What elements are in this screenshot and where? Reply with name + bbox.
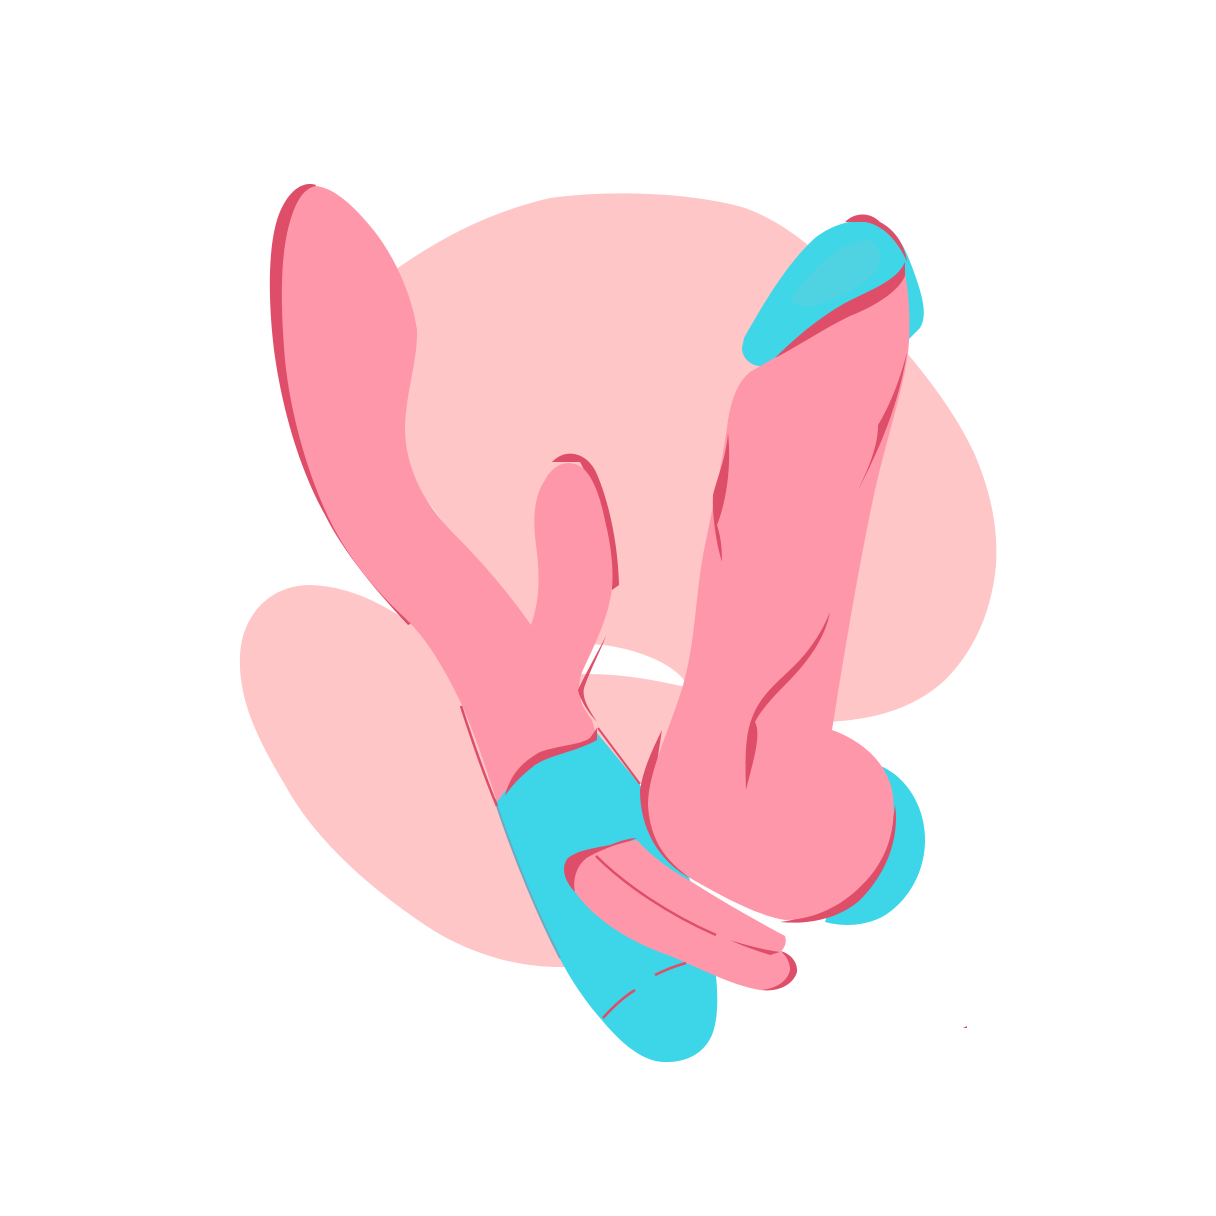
handle left edge line	[497, 806, 560, 958]
fingers	[564, 838, 797, 1018]
finger shadow	[564, 838, 637, 892]
vibrator right edge line	[578, 636, 606, 722]
vibrator neck shadow	[505, 728, 597, 796]
handle crease lines	[603, 963, 686, 1018]
finger tip shadow	[730, 940, 797, 990]
cyan tip	[742, 220, 924, 366]
realistic toy	[640, 214, 925, 925]
cyan base	[825, 765, 925, 925]
handle right edge line	[598, 728, 640, 784]
vibrator body	[282, 186, 613, 802]
tip ridge	[775, 262, 905, 358]
vibrator	[270, 184, 717, 1062]
background blob: lower left	[240, 585, 565, 967]
vein: centre	[746, 612, 830, 790]
finger body	[574, 840, 796, 990]
vibrator left edge line	[461, 706, 497, 806]
toy shadow edge	[640, 214, 907, 923]
tip highlight	[790, 240, 880, 306]
stray mark	[963, 1026, 967, 1028]
background blob: centre fragment	[575, 674, 690, 784]
vibrator shadow edge	[270, 184, 619, 625]
toy body	[648, 273, 909, 920]
vibrator handle	[495, 733, 717, 1062]
vein: upper right	[858, 352, 907, 490]
vein: upper left	[713, 433, 729, 562]
background blob: large upper right	[390, 193, 996, 722]
finger crease	[596, 856, 716, 935]
